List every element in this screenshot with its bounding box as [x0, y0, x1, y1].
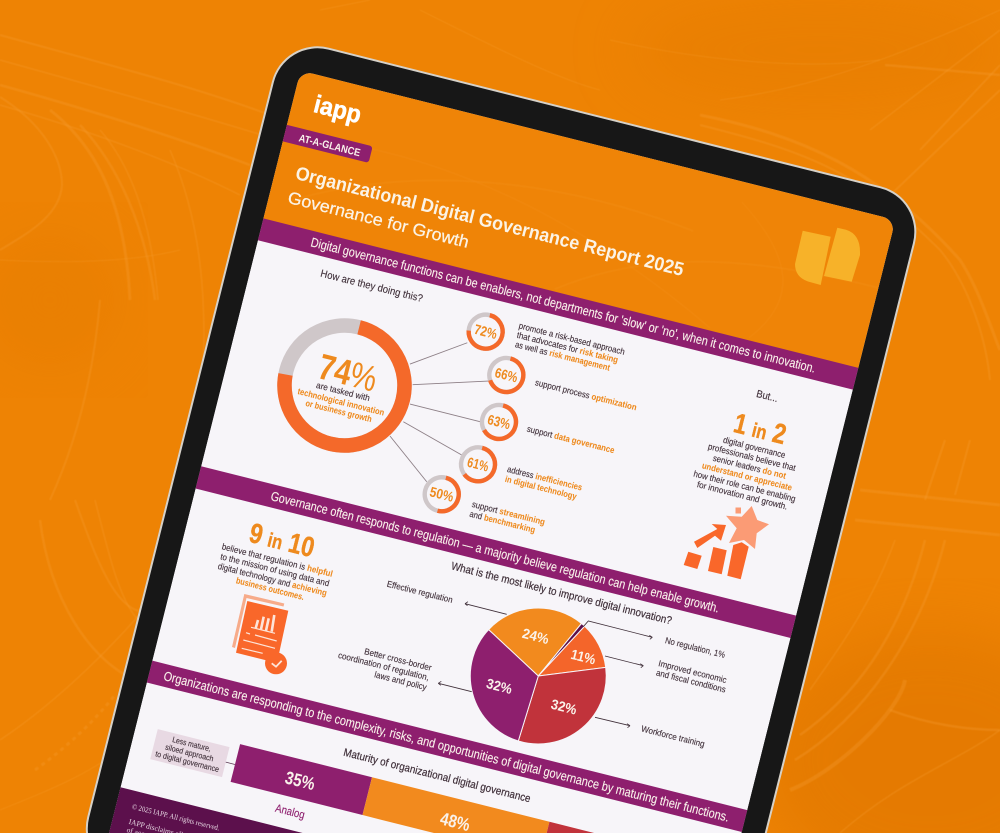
- callout: less mature: Less mature,: [171, 735, 212, 753]
- label: inefficiencies: in digital technology: [504, 474, 578, 501]
- footer: [106, 787, 716, 833]
- callout: less mature: siloed approach: [164, 743, 214, 763]
- pie label: economic conditions: and fiscal conditions: [655, 667, 727, 695]
- heading: maturity: Maturity of organizational digital governance: [342, 747, 532, 805]
- pie label: workforce training: Workforce training: [640, 724, 706, 749]
- pie values: 32%: [485, 675, 514, 697]
- title: Organizational Digital Governance Report 2025: [293, 163, 686, 281]
- logo: iapp: iapp: [311, 90, 364, 129]
- small donut: 66 percent: 66%: [493, 364, 520, 385]
- small donut: 63 percent: [480, 402, 518, 442]
- text: regulation helpful: [218, 543, 333, 600]
- bar: analog 35 percent: Analog: [274, 803, 306, 822]
- banner: enablers: Digital governance functions can be enablers, not departments for 'slow' or 'no', when it comes to innovation.: [309, 234, 817, 376]
- icon: brand mark: [795, 228, 860, 285]
- question: improve innovation: What is the most likely to improve digital innovation?: [450, 560, 673, 627]
- label: process optimization: support process optimization: [534, 377, 638, 412]
- callout: less mature: to digital governance: [154, 749, 221, 774]
- small donut: 50 percent: [422, 475, 461, 514]
- pie leader arrows: [438, 602, 652, 728]
- tag: at-a-glance: [278, 124, 373, 163]
- pie label: economic conditions: [656, 660, 726, 692]
- text: senior leaders: [694, 437, 796, 510]
- label: inefficiencies: address inefficiencies: [506, 464, 583, 493]
- tag: at-a-glance: AT-A-GLANCE: [298, 132, 362, 159]
- header band: [263, 70, 896, 368]
- small donut: 50 percent: 50%: [428, 483, 456, 505]
- text: senior leaders: understand or appreciate: [701, 460, 793, 493]
- text: senior leaders: digital governance: [722, 435, 787, 460]
- pie label: no regulation: No regulation, 1%: [664, 635, 726, 660]
- donut: 74 percent: 74%: [314, 346, 381, 400]
- pie label: cross-border coordination: coordination of regulation,: [337, 650, 430, 682]
- label: streamlining: support streamlining: [471, 499, 546, 527]
- text: regulation helpful: business outcomes.: [235, 575, 305, 602]
- label: risk-based approach: promote a risk-based approach: [518, 321, 626, 357]
- icon: document with check: [232, 594, 288, 674]
- pie values: 32%: [549, 696, 579, 718]
- pie chart: [470, 608, 606, 744]
- label: risk-based approach: as well as risk management: [514, 339, 611, 373]
- pie label: effective regulation: Effective regulation: [386, 579, 454, 605]
- connector lines: [390, 342, 488, 482]
- donut: 74 percent: or business growth: [304, 398, 373, 424]
- donut: 74 percent: [277, 318, 412, 453]
- bar: analog 35 percent: 35%: [283, 767, 317, 794]
- donut: 74 percent: are tasked with: [315, 380, 371, 403]
- pie values: 11%: [569, 646, 598, 668]
- small donut: 66 percent: [487, 356, 526, 394]
- pie label: cross-border coordination: laws and policy: [373, 669, 428, 692]
- bar: analog 35 percent: [230, 744, 372, 821]
- banner: regulation: Governance often responds to regulation — a majority believe regulation can help enable growth.: [269, 488, 721, 615]
- subtitle: Governance for Growth: [286, 188, 471, 252]
- small donut: 61 percent: 61%: [466, 454, 491, 475]
- callout: less mature: [150, 729, 239, 779]
- stat: 9 in 10: 9 in 10: [246, 517, 318, 563]
- icon: growth chart with star: [684, 506, 769, 579]
- label: risk-based approach: that advocates for risk taking: [516, 330, 619, 365]
- text: senior leaders: how their role can be enabling: [692, 469, 797, 504]
- label: data governance: support data governance: [526, 424, 616, 455]
- pie label: economic conditions: Improved economic: [657, 658, 728, 685]
- text: senior leaders: professionals believe that: [707, 441, 797, 473]
- tablet screen: [101, 69, 896, 833]
- text: senior leaders: for innovation and growth.: [696, 479, 789, 512]
- label: inefficiencies: [505, 467, 582, 501]
- pie values: [485, 625, 598, 718]
- text: regulation helpful: to the mission of using data and: [219, 551, 331, 588]
- bar: 48 percent: [363, 777, 549, 833]
- text: but: But...: [755, 388, 779, 405]
- small donut: 61 percent: [458, 445, 498, 484]
- small donut: 72 percent: [466, 312, 505, 351]
- label: streamlining: and benchmarking: [468, 509, 536, 535]
- screen body: [106, 70, 896, 833]
- pie label: cross-border coordination: Better cross-border: [363, 646, 433, 673]
- donut: 74 percent: technological innovation: [297, 386, 385, 418]
- pie values: 24%: [521, 625, 551, 647]
- text: regulation helpful: digital technology and achieving: [217, 561, 328, 598]
- small donut: 72 percent: 72%: [473, 321, 499, 342]
- text: regulation helpful: believe that regulation is helpful: [221, 541, 334, 579]
- question: how are they doing this: How are they doing this?: [319, 268, 424, 305]
- bar: 17 percent: [540, 822, 614, 833]
- stat: 1 in 2: 1 in 2: [731, 407, 790, 450]
- text: senior leaders: senior leaders do not: [712, 453, 787, 481]
- small donut: 63 percent: 63%: [486, 411, 513, 432]
